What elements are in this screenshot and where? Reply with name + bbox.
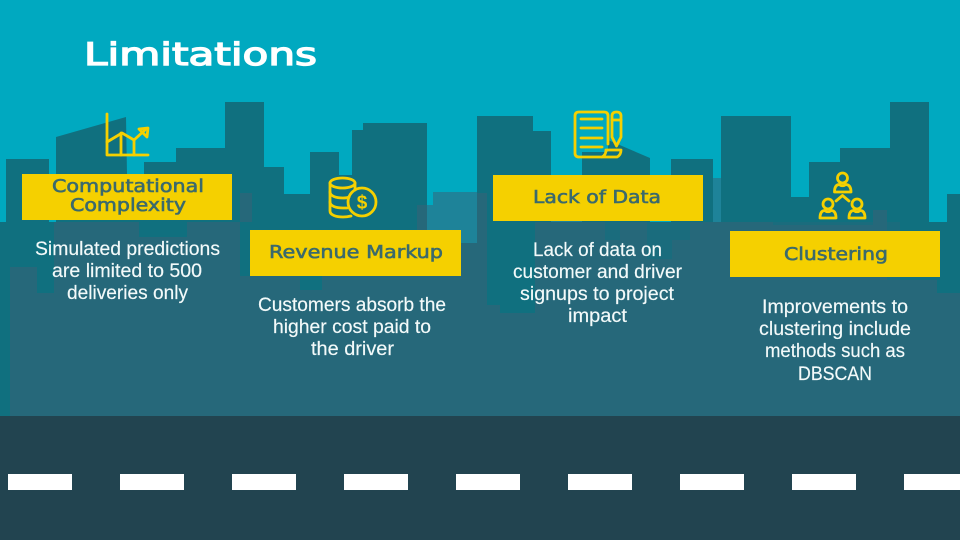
heading bar: Revenue Markup [269,243,443,263]
heading bar [730,231,940,277]
body text: DBSCAN [798,364,872,385]
body text: higher cost paid to [273,317,431,338]
heading bar [250,230,461,276]
heading bar: Lack of Data [533,188,661,208]
title: Limitations [84,37,317,73]
body text: customer and driver [513,262,683,283]
icon: line chart with arrow [107,114,148,155]
road lane dashes [8,474,960,490]
body text: Lack of data on [533,240,662,261]
body text: Improvements to [762,297,908,318]
icon: three connected people [820,173,865,218]
heading bar [493,175,703,221]
heading bar [22,174,232,220]
body text [513,240,683,327]
body text: deliveries only [67,283,188,304]
body text: clustering include [759,319,911,340]
icon: document and pencil [575,112,621,157]
body text: the driver [311,339,395,360]
heading bar: Complexity [70,196,186,216]
body text: impact [568,306,628,327]
icon: coins with dollar: $ [357,192,368,214]
body text [759,297,911,385]
body text: Customers absorb the [258,295,446,316]
panel: revenue markup [250,178,461,360]
body text [258,295,446,360]
city skyline illustration [0,102,960,416]
body text: signups to project [520,284,675,305]
body text: are limited to 500 [52,261,202,282]
icon: coins with dollar [330,178,376,217]
heading bar: Computational [52,177,204,197]
body text [35,239,220,304]
body text: methods such as [765,341,905,362]
heading bar: Clustering [784,245,888,265]
panel: computational complexity [22,114,232,304]
body text: Simulated predictions [35,239,220,260]
panel: clustering [730,173,940,385]
road [0,416,960,540]
panel: lack of data [493,112,703,327]
